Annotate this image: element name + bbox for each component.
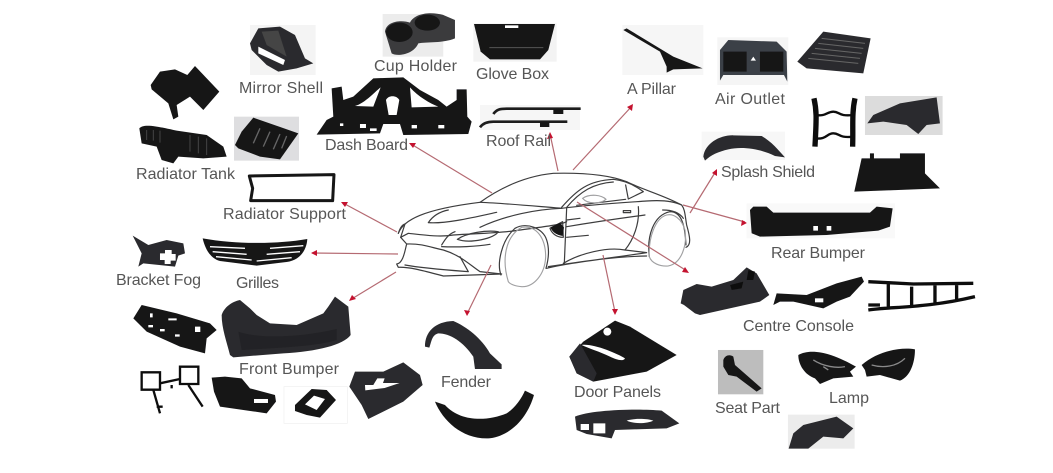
car line drawing bbox=[397, 173, 690, 287]
label: mirror shell: Mirror Shell bbox=[239, 80, 323, 97]
label: glove box: Glove Box bbox=[476, 66, 549, 83]
part: seat trim bbox=[788, 415, 855, 449]
arrows from car to parts bbox=[311, 104, 747, 316]
label: rear bumper: Rear Bumper bbox=[771, 245, 866, 262]
part: h bracket cross links bbox=[815, 112, 853, 139]
arrow: front bumper bbox=[349, 272, 396, 301]
part: vent grille bbox=[797, 32, 871, 73]
part: h bracket bbox=[814, 98, 855, 147]
upper-right parts bbox=[473, 23, 943, 238]
part: radiator tank bbox=[139, 126, 227, 163]
arrow: dash board bbox=[409, 143, 492, 193]
part: left lamp bbox=[798, 352, 856, 384]
part: dash board bbox=[317, 77, 472, 135]
label: dash board: Dash Board bbox=[325, 137, 408, 154]
label: bracket fog: Bracket Fog bbox=[116, 272, 201, 289]
part: rear bumper bbox=[747, 203, 895, 238]
label: splash shield: Splash Shield bbox=[721, 164, 815, 181]
part: front bumper bbox=[222, 297, 351, 357]
part: side panel bbox=[865, 96, 943, 135]
part: glove box bbox=[473, 23, 557, 62]
arrow: radiator support bbox=[341, 202, 397, 232]
label: centre console: Centre Console bbox=[743, 318, 854, 335]
arrow: grilles bbox=[311, 250, 398, 256]
part: a pillar bbox=[622, 25, 703, 75]
part: door panel bbox=[569, 321, 677, 382]
lower-left parts bbox=[133, 236, 534, 438]
part: wheel arch bbox=[435, 391, 534, 438]
part: console bracket bbox=[773, 277, 864, 308]
arrow: fender bbox=[464, 265, 491, 316]
label: fender: Fender bbox=[441, 374, 492, 391]
label: grilles: Grilles bbox=[236, 275, 279, 292]
part: mirror shell bbox=[250, 25, 316, 75]
part: clip housing bbox=[151, 66, 219, 119]
part: support bracket bbox=[133, 305, 217, 353]
arrow: a pillar bbox=[573, 104, 633, 170]
lower-right parts bbox=[569, 267, 975, 449]
label: radiator support: Radiator Support bbox=[223, 206, 347, 223]
arrow: splash shield bbox=[690, 169, 717, 213]
part labels bbox=[116, 58, 869, 417]
label: air outlet: Air Outlet bbox=[715, 91, 786, 108]
part: cup holder bbox=[383, 13, 455, 57]
part: tray bbox=[854, 153, 940, 192]
label: front bumper: Front Bumper bbox=[239, 361, 340, 378]
part: centre console bbox=[681, 267, 769, 315]
part: seat part bbox=[718, 350, 763, 394]
part: door handle bbox=[212, 377, 276, 413]
part: splash shield bbox=[702, 132, 785, 161]
part: intake manifold bbox=[234, 117, 299, 161]
part: grilles bbox=[203, 238, 307, 266]
part: door trim bbox=[575, 410, 679, 438]
label: lamp: Lamp bbox=[829, 390, 869, 407]
part: roof rail bbox=[480, 105, 581, 130]
upper-left parts bbox=[139, 13, 472, 201]
arrow: door panels bbox=[603, 255, 618, 315]
arrow: centre console bbox=[577, 202, 689, 273]
arrow: rear bumper bbox=[683, 205, 747, 226]
part: air outlet bbox=[717, 37, 788, 85]
part: right lamp bbox=[862, 349, 915, 381]
label: radiator tank: Radiator Tank bbox=[136, 166, 236, 183]
label: a pillar: A Pillar bbox=[627, 81, 677, 98]
label: seat part: Seat Part bbox=[715, 400, 781, 417]
part: radiator support bbox=[249, 175, 334, 201]
part: fender liner bbox=[425, 321, 502, 369]
label: roof rail: Roof Rail bbox=[486, 133, 551, 150]
arrow: roof rail bbox=[547, 132, 558, 171]
label: cup holder: Cup Holder bbox=[374, 58, 458, 75]
part: bracket fog bbox=[133, 236, 185, 267]
part: shifter bezel bbox=[349, 362, 423, 419]
part: console frame bbox=[868, 282, 975, 310]
part: mirror frames bbox=[142, 367, 203, 413]
label: door panels: Door Panels bbox=[574, 384, 661, 401]
part: buckle bbox=[284, 387, 347, 423]
